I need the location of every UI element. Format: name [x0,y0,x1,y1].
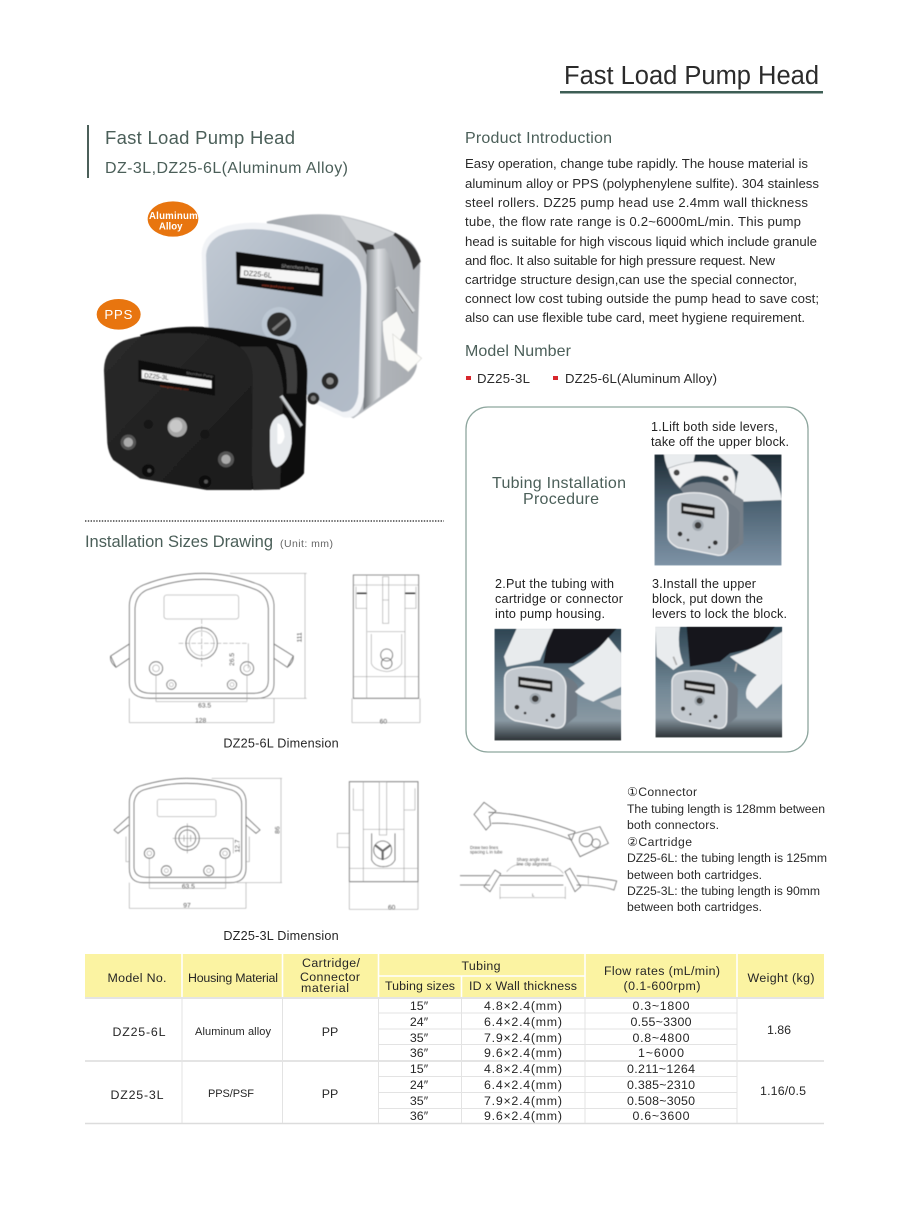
table header: Connector [300,970,360,984]
step 2 text: cartridge or connector [495,592,623,606]
tubing rows: 24″ [410,1078,429,1092]
step 3 text: block, put down the [652,592,763,606]
tubing rows: 0.8~4800 [632,1031,690,1045]
product description text: also can use flexible tube card, meet hygiene requirement. [465,310,805,325]
front view: 63.5 [198,702,211,709]
black PPS pump [104,327,307,490]
connector tube [474,802,608,857]
tubing rows: 4.8×2.4(mm) [484,1062,562,1076]
product description text [465,156,819,325]
tubing rows: 35″ [410,1031,429,1045]
drawing: DZ25-6L dimension [110,573,420,751]
tubing length notes: The tubing length is 128mm between [627,802,825,816]
product heading [87,125,348,178]
front view: 12.7 [234,839,241,852]
tubing length notes: between both cartridges. [627,868,762,882]
black PPS pump: Shenchen Pump [186,371,213,379]
table header: Tubing sizes [385,979,455,993]
table header: ID x Wall thickness [469,979,577,993]
tubing rows: 4.8×2.4(mm) [484,999,562,1013]
cartridge tube: Sharp angle and [517,857,549,862]
silver aluminum pump: DZ25-6L [243,268,272,280]
cartridge tube: L [532,892,535,897]
tubing rows: 35″ [410,1094,429,1108]
drawing: DZ25-3L dimension [114,778,418,943]
model list: DZ25-6L(Aluminum Alloy) [565,371,717,386]
step 1 text [651,420,789,449]
specification table [85,954,824,1124]
badge: PPS [97,299,141,330]
table header [85,954,824,997]
table header: Model No. [108,971,166,985]
page title: Fast Load Pump Head [564,62,819,90]
front view: 86 [274,826,281,834]
panel heading [492,475,626,508]
tubing rows: 15″ [410,999,429,1013]
tubing length notes: ①Connector [627,785,697,799]
badge: aluminum alloy: Aluminum [149,211,198,222]
tubing rows: 24″ [410,1015,429,1029]
tubing rows: 0.385~2310 [627,1078,695,1092]
tubing rows: 7.9×2.4(mm) [484,1031,562,1045]
tubing rows: 7.9×2.4(mm) [484,1094,562,1108]
silver aluminum pump: Shenchen Pump [281,263,318,273]
tubing rows: 0.508~3050 [627,1094,695,1108]
tubing length notes: DZ25-3L: the tubing length is 90mm [627,884,820,898]
step 3 photo [655,627,782,738]
table header: Flow rates (mL/min) [604,964,720,978]
step 1 photo [654,454,782,566]
tubing rows: 9.6×2.4(mm) [484,1046,562,1060]
table header: Cartridge/ [302,956,361,970]
tubing rows: 1~6000 [638,1046,684,1060]
step 3 text [652,577,787,621]
product description text: connect low cost tubing outside the pump head to save cost; [465,291,819,306]
tubing rows: 0.3~1800 [632,999,690,1013]
tubing rows: 6.4×2.4(mm) [484,1078,562,1092]
caption: DZ25-6L Dimension [223,737,339,751]
panel heading: Tubing Installation [492,475,626,492]
merged cells [110,1023,806,1102]
tubing rows: 36″ [410,1109,429,1123]
tubing length notes [627,785,827,914]
merged cells: Aluminum alloy [195,1026,272,1038]
merged cells: PPS/PSF [208,1088,254,1100]
tubing rows [410,999,695,1123]
merged cells: PP [322,1025,338,1039]
diagram: connector and cartridge tubing [460,802,617,899]
step 3 text: levers to lock the block. [652,607,787,621]
merged cells: PP [322,1087,338,1101]
model list: DZ25-3L [477,371,530,386]
product description text: tube, the flow rate range is 0.2~6000mL/min. This pump [465,214,801,229]
step 2 text [495,577,623,621]
step 1 text: take off the upper block. [651,435,789,449]
table header: Housing Material [188,971,278,985]
product description text: aluminum alloy or PPS (polyphenylene sulfite). 304 stainless [465,176,819,191]
tubing rows: 9.6×2.4(mm) [484,1109,562,1123]
tubing length notes: between both cartridges. [627,900,762,914]
front view: 128 [195,718,207,725]
merged cells: DZ25-6L [112,1025,166,1039]
front view: 97 [183,902,191,909]
merged cells: 1.86 [767,1023,791,1037]
cartridge tube: Draw two lines [470,845,498,850]
tubing rows: 15″ [410,1062,429,1076]
merged cells: DZ25-3L [110,1088,164,1102]
panel heading: Procedure [523,491,599,508]
product description text: and floc. It also suitable for high pressure request. New [465,253,775,268]
product heading: Fast Load Pump Head [105,127,295,148]
cartridge tube: spacing L in tube [470,850,503,855]
model list [466,371,717,386]
product description text: head is suitable for high viscous liquid which include granule [465,234,817,249]
silver aluminum pump: www.good-pump.com [262,283,294,290]
section heading: installation sizes: Installation Sizes Drawing [85,533,273,551]
front view [114,778,282,909]
caption: DZ25-3L Dimension [223,929,339,943]
badge: aluminum alloy: Alloy [159,221,183,232]
tubing rows: 0.211~1264 [627,1062,695,1076]
front view [110,573,307,725]
tubing rows: 0.55~3300 [630,1015,692,1029]
silver aluminum pump [202,214,422,418]
front view: 63.5 [182,883,195,890]
step 3 text: 3.Install the upper [652,577,756,591]
product description text: steel rollers. DZ25 pump head use 2.4mm wall thickness [465,195,808,210]
section heading: installation sizes: (Unit: mm) [280,538,333,550]
step 2 photo [494,629,621,741]
merged cells: 1.16/0.5 [760,1084,806,1098]
tubing rows: 6.4×2.4(mm) [484,1015,562,1029]
tubing length notes: DZ25-6L: the tubing length is 125mm [627,851,827,865]
tubing length notes: both connectors. [627,818,719,832]
dotted divider [85,520,444,522]
front view: 111 [297,632,304,642]
tubing length notes: ②Cartridge [627,835,692,849]
front view: 26.5 [229,653,236,666]
black PPS pump: DZ25-3L [144,372,169,382]
badge: aluminum alloy [148,201,198,237]
product photo: two pump heads [97,201,422,490]
step 2 text: into pump housing. [495,607,605,621]
step 1 text: 1.Lift both side levers, [651,420,778,434]
cartridge tube [460,845,617,899]
step 2 text: 2.Put the tubing with [495,577,614,591]
table header: Weight (kg) [748,971,814,985]
product heading: DZ-3L,DZ25-6L(Aluminum Alloy) [105,160,348,177]
black PPS pump: www.good-pump.com [160,384,189,392]
side view: 60 [388,904,396,911]
section heading: product introduction: Product Introduction [465,130,612,147]
side view: 60 [380,718,387,725]
tubing rows: 0.6~3600 [632,1109,690,1123]
product description text: cartridge structure design,can use the special connector, [465,272,797,287]
side view [337,782,418,911]
section heading: model number: Model Number [465,343,572,360]
cartridge tube: line clip alignment [517,862,552,867]
tubing rows: 36″ [410,1046,429,1060]
table header: Tubing [462,959,501,973]
table header: material [301,981,349,995]
table header: (0.1-600rpm) [624,979,700,993]
row lines [182,998,737,1123]
table grid [85,998,824,1124]
side view [352,575,420,725]
panel: tubing installation procedure [466,407,808,752]
product description text: Easy operation, change tube rapidly. The house material is [465,156,808,171]
badge: PPS: PPS [104,307,133,322]
